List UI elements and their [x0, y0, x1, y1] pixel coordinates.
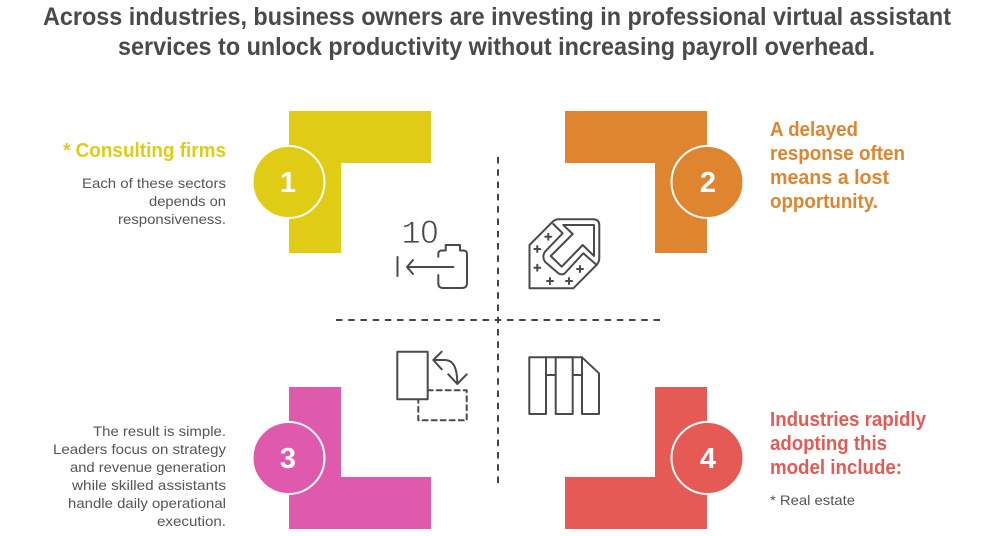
text block: delayed response: response often: [770, 143, 905, 165]
text block: consulting firms: responsiveness.: [118, 211, 226, 227]
panel: quadrant 1 shape: 1: [280, 167, 296, 199]
text block: result: while skilled assistants: [71, 477, 226, 493]
text block: industries: adopting this: [770, 433, 887, 455]
icon: arrow breaking out of a sparkled shape: [530, 219, 599, 288]
panel: quadrant 2 shape: [565, 111, 744, 253]
dashed cross divider: [336, 157, 660, 483]
icon: columns with cut corner: [529, 357, 599, 414]
text block: result: handle daily operational: [68, 495, 226, 511]
icon: rectangle rotating into dashed rectangle: [397, 352, 467, 420]
icon: ten with arrow and bottle: 0: [420, 214, 438, 250]
text block: result: The result is simple.: [93, 423, 226, 439]
icon: ten with arrow and bottle: 1: [402, 216, 421, 253]
text block: result: Leaders focus on strategy: [53, 441, 226, 457]
text block: consulting firms: [63, 140, 226, 227]
text block: result: execution.: [157, 513, 226, 529]
title: Across industries, business owners are investing in professional virtual assistant: [43, 3, 952, 31]
text block: delayed response: means a lost: [770, 167, 889, 189]
text block: delayed response: opportunity.: [770, 191, 878, 213]
panel: quadrant 4 shape: 4: [700, 443, 716, 475]
panel: quadrant 3 shape: 3: [280, 443, 296, 475]
title: [43, 3, 952, 61]
text block: industries: Industries rapidly: [770, 409, 927, 431]
panel: quadrant 4 shape: [565, 387, 744, 529]
text block: industries: [770, 409, 927, 508]
panel: quadrant 3 shape: [252, 387, 431, 529]
text block: delayed response: A delayed: [770, 119, 858, 141]
icon: ten with arrow and bottle: [398, 214, 467, 288]
panel: quadrant 2 shape: 2: [700, 167, 716, 199]
text block: result: [53, 423, 226, 529]
panel: quadrant 1 shape: [252, 111, 431, 253]
text block: industries: * Real estate: [770, 492, 855, 508]
text block: consulting firms: Each of these sectors: [82, 175, 226, 191]
text block: delayed response: [770, 119, 905, 213]
title: services to unlock productivity without increasing payroll overhead.: [118, 33, 875, 61]
text block: industries: model include:: [770, 457, 902, 479]
text block: result: and revenue generation: [70, 459, 226, 475]
text block: consulting firms: depends on: [149, 193, 226, 209]
text block: consulting firms: * Consulting firms: [63, 140, 226, 162]
